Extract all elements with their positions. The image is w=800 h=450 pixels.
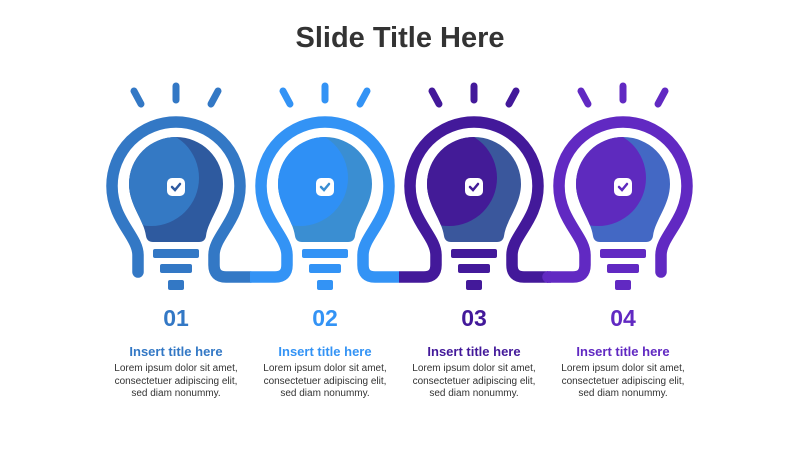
- title: Slide Title Here: [296, 22, 504, 54]
- text block 2: Lorem ipsum dolor sit amet,: [263, 363, 387, 374]
- bulb 3: [399, 86, 548, 290]
- text block 4: Lorem ipsum dolor sit amet,: [561, 363, 685, 374]
- bulb 1: [103, 86, 250, 290]
- text block 4: sed diam nonummy.: [578, 388, 668, 399]
- text block 1: [114, 305, 238, 399]
- text block 4: consectetuer adipiscing elit,: [562, 376, 684, 386]
- bulbs graphic: [106, 82, 693, 290]
- text block 1: sed diam nonummy.: [131, 388, 221, 399]
- text block 4: Insert title here: [576, 344, 670, 359]
- text block 2: Insert title here: [278, 344, 372, 359]
- bulb 4: [547, 86, 687, 290]
- text block 4: 04: [610, 305, 636, 331]
- text block 1: Insert title here: [129, 344, 223, 359]
- text block 3: consectetuer adipiscing elit,: [413, 376, 535, 386]
- text block 2: [263, 305, 387, 399]
- text block 3: sed diam nonummy.: [429, 388, 519, 399]
- text block 4: [561, 305, 685, 399]
- text block 3: Insert title here: [427, 344, 521, 359]
- text block 1: Lorem ipsum dolor sit amet,: [114, 363, 238, 374]
- text block 3: [412, 305, 536, 399]
- text block 2: 02: [312, 305, 338, 331]
- text block 1: 01: [163, 305, 189, 331]
- text block 3: Lorem ipsum dolor sit amet,: [412, 363, 536, 374]
- bulb 2: [250, 86, 399, 290]
- text block 2: sed diam nonummy.: [280, 388, 370, 399]
- text block 2: consectetuer adipiscing elit,: [264, 376, 386, 386]
- text block 3: 03: [461, 305, 487, 331]
- text block 1: consectetuer adipiscing elit,: [115, 376, 237, 386]
